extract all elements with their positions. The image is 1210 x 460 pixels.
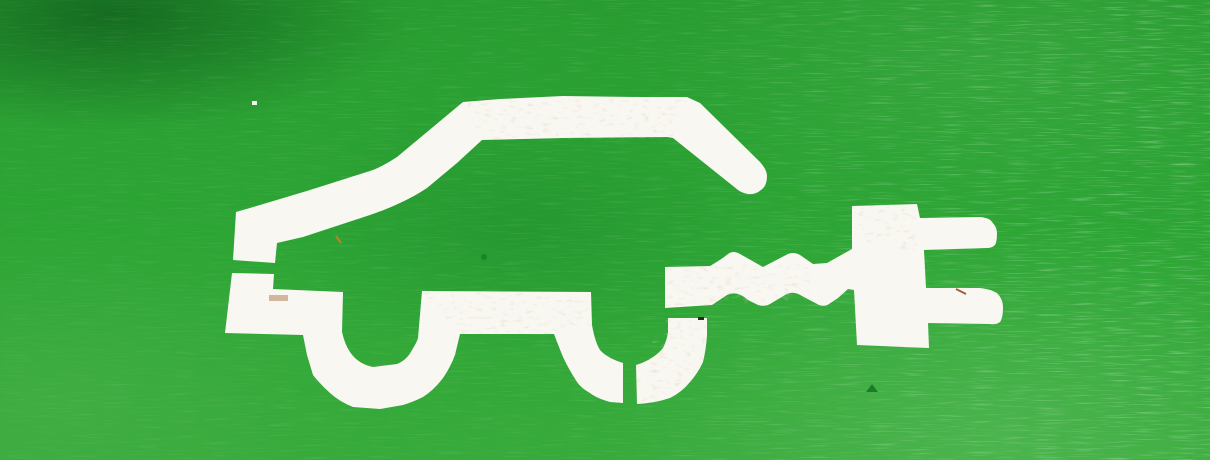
paint wear on stencil — [422, 97, 920, 404]
car body and wheel arches — [225, 273, 623, 409]
rear wheel arch — [636, 318, 707, 404]
icon: electric car with plug — [225, 96, 1003, 409]
charging cable and plug — [665, 204, 1003, 348]
car roof and hood stroke — [233, 96, 767, 263]
rust specks and scuffs — [252, 101, 966, 392]
